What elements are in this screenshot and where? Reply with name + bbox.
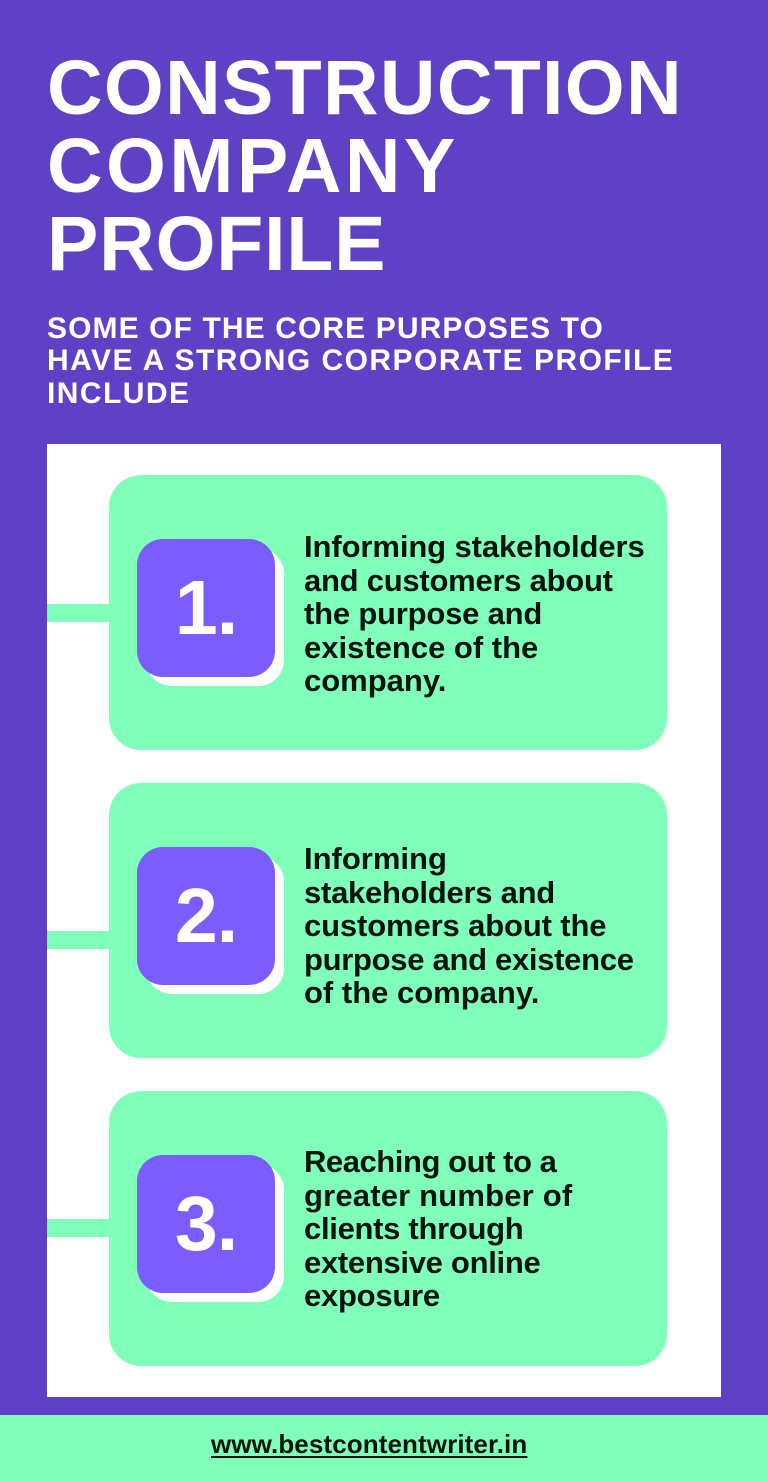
card 2 text: purpose and existence bbox=[304, 942, 634, 976]
card 2 text: of the company. bbox=[304, 975, 539, 1010]
card 3 text: extensive online bbox=[304, 1244, 540, 1280]
number badge shadow 1 bbox=[146, 548, 284, 686]
number badge 1 bbox=[137, 539, 275, 677]
number badge shadow 3 bbox=[146, 1164, 284, 1302]
footer bbox=[0, 1415, 768, 1482]
number badge 2 bbox=[137, 847, 275, 985]
card 3 text: greater number of bbox=[304, 1178, 572, 1212]
title: CONSTRUCTION bbox=[47, 45, 683, 131]
card 2 text: customers about the bbox=[304, 908, 606, 943]
card 1 bbox=[109, 475, 667, 750]
connector 1 bbox=[47, 604, 111, 622]
card 1 text: the purpose and bbox=[304, 596, 542, 631]
card 1 text: existence of the bbox=[304, 630, 538, 664]
subtitle bbox=[47, 312, 674, 410]
subtitle: SOME OF THE CORE PURPOSES TO bbox=[47, 312, 604, 344]
number badge 3: 3. bbox=[175, 1181, 237, 1267]
card 3 text: clients through bbox=[304, 1211, 523, 1246]
title bbox=[47, 45, 683, 287]
title: PROFILE bbox=[47, 201, 386, 287]
card 1 text: and customers about bbox=[304, 562, 613, 598]
card 1 text bbox=[304, 529, 645, 698]
subtitle: INCLUDE bbox=[47, 376, 190, 410]
connector 2 bbox=[47, 931, 111, 949]
number badge 3 bbox=[137, 1155, 275, 1293]
footer: www.bestcontentwriter.in bbox=[211, 1429, 527, 1459]
card 2 bbox=[109, 783, 667, 1058]
card 3 text: exposure bbox=[304, 1278, 440, 1313]
card 2 text: Informing bbox=[304, 841, 447, 876]
panel: white list background bbox=[47, 444, 721, 1397]
card 1 text: Informing stakeholders bbox=[304, 529, 645, 564]
number badge 2: 2. bbox=[175, 873, 237, 959]
card 3 text bbox=[304, 1144, 572, 1313]
card 3 text: Reaching out to a bbox=[304, 1144, 556, 1179]
title: COMPANY bbox=[47, 123, 459, 209]
number badge shadow 2 bbox=[146, 856, 284, 994]
connector 3 bbox=[47, 1219, 111, 1237]
card 2 text bbox=[304, 841, 634, 1010]
card 1 text: company. bbox=[304, 663, 446, 698]
card 2 text: stakeholders and bbox=[304, 874, 555, 910]
subtitle: HAVE A STRONG CORPORATE PROFILE bbox=[47, 344, 674, 377]
card 3 bbox=[109, 1091, 667, 1366]
number badge 1: 1. bbox=[175, 565, 237, 651]
